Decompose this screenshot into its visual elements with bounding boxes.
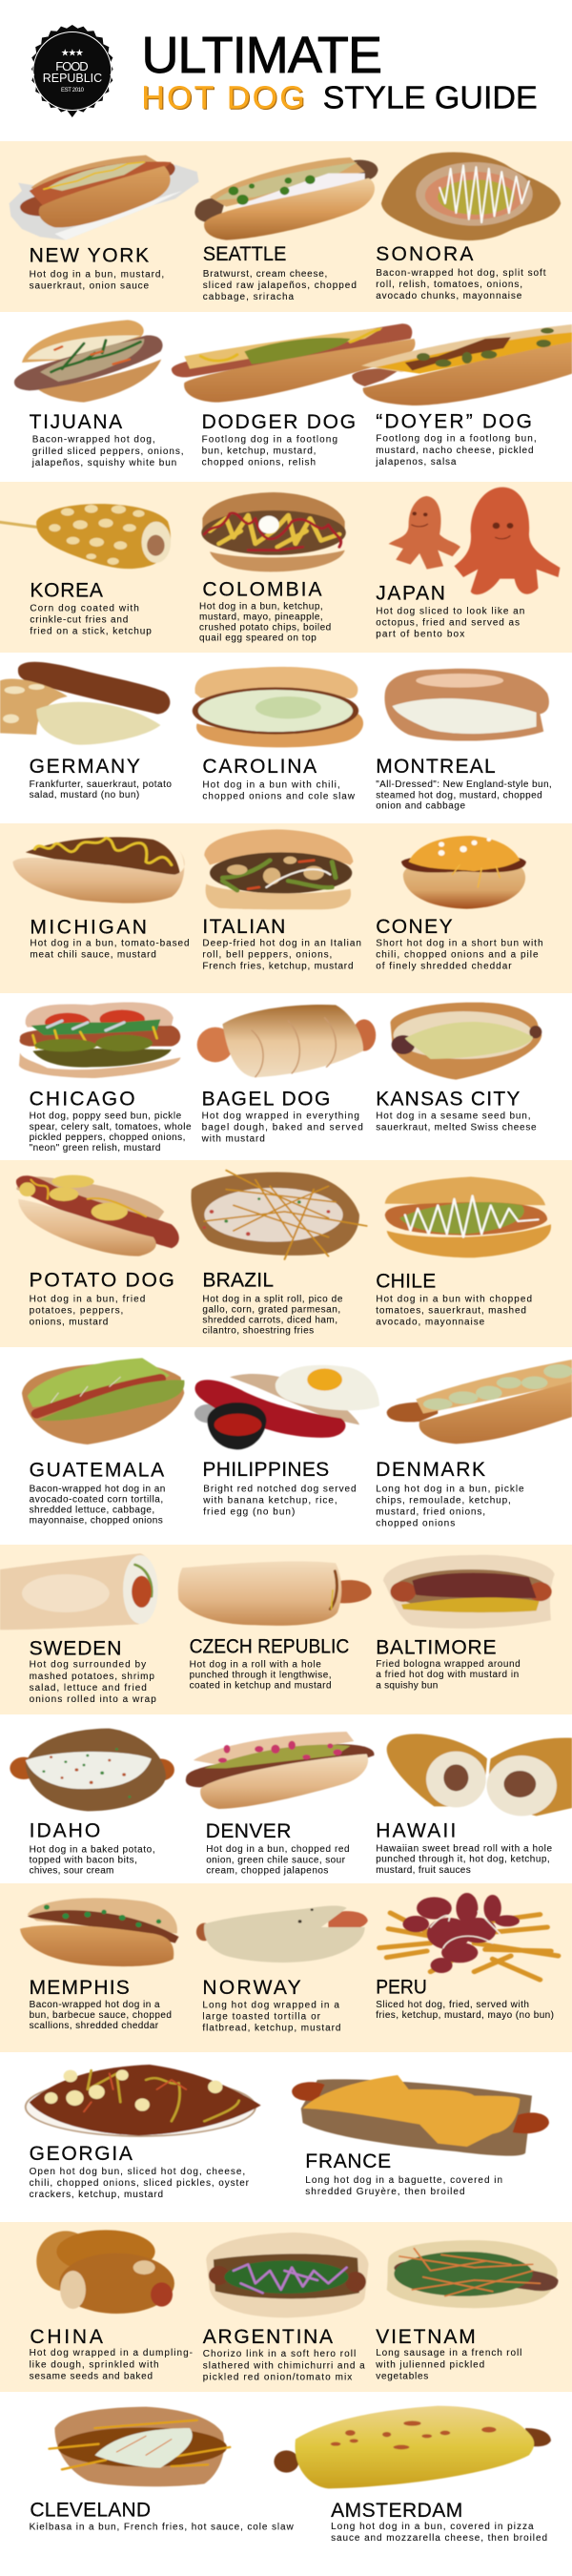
description: Philippines: Bright red notched dog served <box>203 1485 357 1495</box>
description: Chile <box>376 1294 532 1328</box>
title: Style Guide: STYLE GUIDE <box>323 80 538 115</box>
illustration: Montreal <box>384 669 549 741</box>
description: Guatemala <box>30 1484 165 1526</box>
description: Sonora: roll, relish, tomatoes, onions, <box>376 280 522 290</box>
description: Chile: tomatoes, sauerkraut, mashed <box>376 1306 526 1317</box>
description: Guatemala: avocado-coated corn tortilla, <box>30 1494 163 1505</box>
panel: row 7 <box>0 1160 572 1347</box>
description: Baltimore <box>376 1659 521 1691</box>
heading: Baltimore: BALTIMORE <box>376 1636 496 1658</box>
description: Czech Republic: coated in ketchup and mustard <box>190 1681 332 1692</box>
heading: Sweden: SWEDEN <box>30 1637 121 1659</box>
heading: Peru: PERU <box>376 1976 427 1998</box>
description: Idaho: topped with bacon bits, <box>30 1855 137 1865</box>
description: Colombia: quail egg speared on top <box>199 634 317 644</box>
description: Sonora: Bacon-wrapped hot dog, split soft <box>376 268 546 279</box>
entry: Italian <box>202 829 361 972</box>
description: Bagel Dog: Hot dog wrapped in everything <box>202 1111 359 1122</box>
description: Peru: Sliced hot dog, fried, served with <box>376 2000 529 2010</box>
illustration: Tijuana <box>14 320 163 403</box>
entry: Dodger Dog <box>172 323 416 468</box>
description: Argentina: Chorizo link in a soft hero roll <box>203 2349 356 2359</box>
description: Japan: octopus, fried and served as <box>376 618 520 629</box>
entry: Denmark <box>376 1360 572 1528</box>
entry: Norway <box>196 1905 368 2033</box>
illustration: Norway <box>196 1905 368 1963</box>
description: Japan: Hot dog sliced to look like an <box>376 607 524 617</box>
illustration: Coney <box>401 836 526 909</box>
description: Montreal: onion and cabbage <box>376 800 465 811</box>
description: Dodger Dog: Footlong dog in a footlong <box>202 435 337 446</box>
description: Germany: Frankfurter, sauerkraut, potato <box>30 779 172 790</box>
description: Korea: fried on a stick, ketchup <box>30 627 152 637</box>
description: Tijuana: jalapeños, squishy white bun <box>31 458 176 468</box>
illustration: Chile <box>385 1176 551 1257</box>
description: China <box>30 2348 193 2381</box>
description: Georgia <box>30 2167 250 2200</box>
description: Denver: cream, chopped jalapenos <box>206 1865 328 1876</box>
description: Hawaii: Hawaiian sweet bread roll with a hole <box>376 1844 552 1855</box>
description: Carolina: chopped onions and cole slaw <box>202 791 356 801</box>
description: Dodger Dog <box>202 435 337 468</box>
description: Norway <box>202 2000 340 2033</box>
panel: row 14 <box>30 2406 551 2544</box>
illustration: Sonora <box>381 152 561 240</box>
heading: China: CHINA <box>30 2326 103 2348</box>
description: Korea: Corn dog coated with <box>30 603 139 613</box>
description: Chicago: Hot dog, poppy seed bun, pickle <box>30 1111 182 1122</box>
description: Seattle <box>203 269 357 302</box>
description: Montreal <box>376 779 552 811</box>
entry: New York <box>10 156 199 292</box>
panel: row 11 <box>0 1883 572 2052</box>
description: Montreal: "All-Dressed": New England-style bun, <box>376 779 552 790</box>
entry: Vietnam <box>375 2240 559 2381</box>
illustration: Hawaii <box>387 1734 572 1816</box>
entry: Colombia <box>199 492 346 644</box>
description: Idaho: chives, sour cream <box>30 1866 113 1877</box>
description: Amsterdam: sauce and mozzarella cheese, then broiled <box>331 2533 547 2544</box>
entry: Kansas City <box>376 1003 541 1133</box>
description: New York <box>30 270 164 292</box>
description: France: Long hot dog in a baguette, covered in <box>305 2175 502 2186</box>
description: Coney: Short hot dog in a short bun with <box>376 939 543 949</box>
illustration: Chicago <box>19 1002 180 1078</box>
description: Hawaii <box>376 1844 552 1876</box>
panel: row 10 <box>10 1729 572 1877</box>
description: Kansas City <box>376 1111 537 1133</box>
heading: Coney: CONEY <box>376 916 453 938</box>
description: France <box>305 2175 502 2197</box>
panel: row 8 <box>22 1358 572 1528</box>
panel: row 13 <box>0 2222 572 2392</box>
description: Coney: of finely shredded cheddar <box>376 962 512 972</box>
description: Brazil: cilantro, shoestring fries <box>202 1326 314 1337</box>
entry: Argentina <box>203 2233 369 2382</box>
description: Bagel Dog <box>201 1111 363 1145</box>
illustration: Cleveland <box>50 2407 230 2486</box>
entry: Chile <box>376 1176 551 1328</box>
illustration: China <box>36 2230 174 2314</box>
heading: Michigan: MICHIGAN <box>30 917 147 939</box>
description: Memphis: bun, barbecue sauce, chopped <box>30 2010 172 2021</box>
entry: Czech Republic <box>178 1562 372 1692</box>
description: Dodger Dog: chopped onions, relish <box>202 458 316 468</box>
illustration: Germany <box>0 662 170 745</box>
panel: row 6 <box>19 1002 541 1153</box>
illustration: France <box>292 2075 549 2156</box>
entry: Idaho <box>10 1729 174 1877</box>
description: Coney: chili, chopped onions and a pile <box>376 950 539 961</box>
title: Ultimate: ULTIMATE <box>141 27 382 84</box>
illustration: Argentina <box>206 2233 369 2317</box>
description: Michigan <box>30 938 190 961</box>
description: Dodger Dog: bun, ketchup, mustard, <box>202 447 316 457</box>
entry: Tijuana <box>14 320 184 468</box>
description: Denmark: chips, remoulade, ketchup, <box>376 1495 511 1506</box>
description: Michigan: meat chili sauce, mustard <box>30 950 156 961</box>
description: Memphis: Bacon-wrapped hot dog in a <box>30 2000 160 2010</box>
description: Philippines: with banana ketchup, rice, <box>202 1496 337 1506</box>
panel: row 12 <box>26 2065 549 2200</box>
description: New York: Hot dog in a bun, mustard, <box>30 270 164 280</box>
description: Carolina <box>202 779 356 801</box>
heading: Denver: DENVER <box>206 1820 291 1842</box>
description: Tijuana: grilled sliced peppers, onions, <box>32 447 184 457</box>
illustration: Baltimore <box>383 1555 555 1629</box>
panel: row 4 <box>0 662 552 811</box>
heading: New York: NEW YORK <box>30 245 149 267</box>
heading: Chile: CHILE <box>376 1270 436 1292</box>
description: Italian: Deep-fried hot dog in an Italian <box>202 938 361 948</box>
description: Italian <box>202 938 361 972</box>
illustration: Carolina <box>193 667 363 747</box>
description: Czech Republic: Hot dog in a roll with a hole <box>190 1659 321 1670</box>
header <box>31 25 538 117</box>
logo: Food Republic badge <box>31 25 113 117</box>
description: Colombia <box>199 601 331 644</box>
entry: Amsterdam <box>274 2406 551 2544</box>
heading: Kansas City: KANSAS CITY <box>376 1089 520 1111</box>
heading: Dodger Dog: DODGER DOG <box>202 411 356 433</box>
illustration: Japan octopus hot dogs <box>389 488 560 594</box>
description: Argentina <box>203 2349 365 2382</box>
heading: Germany: GERMANY <box>30 756 140 778</box>
illustration: Memphis <box>20 1898 179 1966</box>
heading: Chicago: CHICAGO <box>30 1088 135 1110</box>
description: Denver: onion, green chile sauce, sour <box>206 1855 346 1865</box>
description: Sweden <box>30 1660 156 1705</box>
illustration: Seattle <box>194 157 378 240</box>
entry: Peru <box>376 1893 559 2021</box>
description: Chicago: pickled peppers, chopped onions, <box>30 1132 185 1143</box>
entry: Michigan <box>12 837 190 961</box>
description: Denmark: Long hot dog in a bun, pickle <box>376 1484 524 1494</box>
description: Baltimore: a fried hot dog with mustard in <box>376 1670 519 1680</box>
panel: row 2 <box>14 320 572 468</box>
heading: Montreal: MONTREAL <box>376 756 496 778</box>
heading: Japan: JAPAN <box>376 582 445 604</box>
entry: Germany <box>0 662 172 800</box>
heading: Hawaii: HAWAII <box>376 1819 456 1841</box>
illustration: New York <box>10 156 199 240</box>
description: Seattle: cabbage, sriracha <box>203 292 295 302</box>
description: Seattle: sliced raw jalapeños, chopped <box>203 280 357 291</box>
illustration: Guatemala <box>22 1358 184 1444</box>
entry: Coney <box>376 836 543 972</box>
illustration: Doyer Dog <box>352 324 572 405</box>
illustration: Vietnam <box>387 2240 559 2308</box>
description: Kansas City: Hot dog in a sesame seed bun, <box>376 1111 530 1122</box>
panel: row 9 <box>0 1545 572 1714</box>
description: Sonora: avocado chunks, mayonnaise <box>376 291 522 301</box>
description: Korea: crinkle-cut fries and <box>30 615 128 626</box>
illustration: Czech Republic <box>178 1562 372 1626</box>
title: Hot Dog (orange with drop shadow): HOT DOG <box>143 81 306 116</box>
description: Guatemala: shredded lettuce, cabbage, <box>30 1505 154 1515</box>
heading: Argentina: ARGENTINA <box>203 2326 333 2348</box>
illustration: Philippines <box>194 1365 379 1449</box>
panel: row 3 <box>0 482 572 653</box>
description: Brazil: shredded carrots, diced ham, <box>202 1316 337 1326</box>
description: Sweden: onions rolled into a wrap <box>30 1694 156 1705</box>
heading: Norway: NORWAY <box>202 1977 301 1999</box>
description: New York: sauerkraut, onion sauce <box>30 281 150 292</box>
description: Colombia: mustard, mayo, pineapple, <box>199 612 323 622</box>
description: China: like dough, sprinkled with <box>30 2359 158 2370</box>
description: Denmark: mustard, fried onions, <box>376 1506 485 1517</box>
entry: Philippines <box>194 1365 379 1518</box>
entry: Japan <box>376 488 560 640</box>
heading: Carolina: CAROLINA <box>202 756 317 778</box>
description: Norway: Long hot dog wrapped in a <box>202 2000 339 2010</box>
illustration: Michigan <box>12 837 185 904</box>
description: Chile: Hot dog in a bun with chopped <box>376 1294 532 1304</box>
entry: China <box>30 2230 193 2381</box>
heading: Colombia: COLOMBIA <box>202 579 322 601</box>
description: Doyer Dog <box>375 434 537 467</box>
entry: Sweden <box>0 1553 158 1705</box>
entry: Carolina <box>193 667 363 801</box>
heading: Italian: ITALIAN <box>202 916 285 938</box>
heading: Bagel Dog: BAGEL DOG <box>202 1089 330 1111</box>
description: Korea <box>30 603 152 637</box>
description: Amsterdam: Long hot dog in a bun, covered in pizza <box>331 2522 534 2532</box>
entry: Doyer Dog <box>352 324 572 467</box>
description: Potato Dog: potatoes, peppers, <box>30 1306 123 1317</box>
description: Georgia: crackers, ketchup, mustard <box>30 2190 163 2200</box>
description: Italian: French fries, ketchup, mustard <box>202 962 353 972</box>
entry: Montreal <box>376 669 552 811</box>
description: Guatemala: mayonnaise, chopped onions <box>30 1515 163 1526</box>
entry: France <box>292 2075 549 2197</box>
description: Philippines: fried egg (no bun) <box>203 1507 295 1518</box>
heading: Georgia: GEORGIA <box>30 2143 133 2165</box>
description: Chile: avocado, mayonnaise <box>376 1318 485 1328</box>
description: Montreal: steamed hot dog, mustard, chopped <box>376 790 542 800</box>
illustration: Georgia <box>26 2065 261 2136</box>
entry: Chicago <box>19 1002 192 1153</box>
heading: Potato Dog: POTATO DOG <box>30 1270 174 1292</box>
illustration: Idaho <box>10 1729 174 1811</box>
description: Italian: roll, bell peppers, onions, <box>202 950 332 961</box>
description: Vietnam: vegetables <box>376 2371 428 2381</box>
description: France: shredded Gruyère, then broiled <box>305 2187 465 2197</box>
logo: Food Republic badge: REPUBLIC <box>43 71 102 85</box>
description: Denmark <box>376 1484 524 1528</box>
description: Seattle: Bratwurst, cream cheese, <box>203 269 327 280</box>
illustration: Korea <box>0 504 171 569</box>
description: Bagel Dog: bagel dough, baked and served <box>202 1123 363 1133</box>
heading: Philippines: PHILIPPINES <box>202 1459 329 1481</box>
description: Idaho <box>30 1844 155 1877</box>
description: Colombia: crushed potato chips, boiled <box>199 622 331 633</box>
logo: Food Republic badge: EST 2010 <box>61 88 85 93</box>
description: Baltimore: Fried bologna wrapped around <box>376 1659 521 1670</box>
entry: Baltimore <box>376 1555 555 1691</box>
description: Memphis: scallions, shredded cheddar <box>30 2021 159 2031</box>
description: Philippines <box>202 1485 357 1518</box>
heading: Cleveland: CLEVELAND <box>30 2499 151 2521</box>
description: Idaho: Hot dog in a baked potato, <box>30 1844 155 1855</box>
heading: France: FRANCE <box>305 2150 391 2172</box>
description: Sweden: mashed potatoes, shrimp <box>30 1672 154 1682</box>
heading: Denmark: DENMARK <box>376 1459 485 1481</box>
description: Czech Republic: punched through it lengthwise, <box>190 1670 332 1680</box>
description: Doyer Dog: Footlong dog in a footlong bun, <box>376 434 537 445</box>
description: Potato Dog <box>30 1294 145 1328</box>
heading: Idaho: IDAHO <box>30 1819 100 1841</box>
description: Vietnam: with julienned pickled <box>375 2359 484 2370</box>
illustration: Brazil <box>191 1171 367 1259</box>
description: Brazil: Hot dog in a split roll, pico de <box>202 1294 343 1304</box>
description: Amsterdam <box>331 2522 547 2544</box>
description: Argentina: pickled red onion/tomato mix <box>203 2372 352 2382</box>
description: Sweden: Hot dog surrounded by <box>30 1660 146 1671</box>
entry: Sonora <box>376 152 561 301</box>
heading: Korea: KOREA <box>30 579 103 601</box>
logo: Food Republic badge: FOOD <box>55 59 89 73</box>
description: Carolina: Hot dog in a bun with chili, <box>202 779 340 790</box>
entry: Seattle <box>194 157 378 302</box>
description: Chicago: spear, celery salt, tomatoes, whole <box>30 1122 192 1132</box>
description: Chicago: "neon" green relish, mustard <box>30 1143 160 1153</box>
description: Peru: fries, ketchup, mustard, mayo (no bun) <box>376 2010 554 2021</box>
description: Doyer Dog: mustard, nacho cheese, pickled <box>376 446 534 456</box>
heading: Amsterdam: AMSTERDAM <box>331 2500 462 2522</box>
entry: Brazil <box>191 1171 367 1337</box>
description: Hawaii: mustard, fruit sauces <box>376 1865 471 1876</box>
description: Potato Dog: Hot dog in a bun, fried <box>30 1294 145 1304</box>
description: Brazil <box>202 1294 343 1337</box>
description: China: Hot dog wrapped in a dumpling- <box>30 2348 193 2358</box>
description: Chicago <box>30 1111 192 1153</box>
illustration: Dodger Dog <box>172 323 416 403</box>
illustration: Peru <box>379 1893 559 1980</box>
entry: Korea <box>0 504 171 637</box>
entry: Guatemala <box>22 1358 184 1526</box>
description: Denver <box>206 1844 350 1876</box>
illustration: Kansas City <box>390 1003 541 1080</box>
entry: Memphis <box>20 1898 179 2031</box>
description: Denver: Hot dog in a bun, chopped red <box>206 1844 350 1855</box>
entry: Denver <box>186 1732 374 1876</box>
description: Bagel Dog: with mustard <box>201 1134 265 1145</box>
description: Norway: flatbread, ketchup, mustard <box>202 2023 340 2033</box>
description: Vietnam: Long sausage in a french roll <box>376 2348 521 2358</box>
illustration: Denmark <box>387 1360 572 1444</box>
title: Hot Dog (orange with drop shadow): HOT DOG <box>141 80 305 115</box>
description: Norway: large toasted tortilla or <box>202 2011 321 2022</box>
description: Peru <box>376 2000 554 2021</box>
description: Germany: salad, mustard (no bun) <box>30 790 139 800</box>
description: Tijuana <box>31 435 184 468</box>
illustration: Denver <box>186 1732 374 1809</box>
entry: Potato Dog <box>16 1175 179 1328</box>
description: Tijuana: Bacon-wrapped hot dog, <box>32 435 155 446</box>
description: Doyer Dog: jalapenos, salsa <box>375 457 457 467</box>
description: China: sesame seeds and baked <box>30 2371 153 2381</box>
illustration: Colombia <box>201 492 346 571</box>
heading: Memphis: MEMPHIS <box>30 1977 130 1999</box>
entry: Hawaii <box>376 1734 572 1876</box>
illustration: Sweden <box>0 1553 158 1630</box>
description: Sweden: salad, lettuce and fried <box>30 1683 147 1693</box>
illustration: Bagel Dog <box>197 1005 376 1077</box>
description: Kansas City: sauerkraut, melted Swiss cheese <box>376 1123 537 1133</box>
illustration: Potato Dog <box>16 1175 179 1257</box>
logo: Food Republic badge: ★★★ <box>61 48 84 59</box>
description: Georgia: chili, chopped onions, sliced pickles, oyster <box>30 2178 250 2189</box>
description: Guatemala: Bacon-wrapped hot dog in an <box>30 1484 165 1494</box>
panel: row 1 <box>0 141 572 312</box>
description: Germany <box>30 779 172 800</box>
heading: Vietnam: VIETNAM <box>376 2326 476 2348</box>
description: Coney <box>376 939 543 972</box>
description: Vietnam <box>375 2348 521 2381</box>
description: Potato Dog: onions, mustard <box>30 1318 108 1328</box>
illustration: Amsterdam <box>274 2406 551 2488</box>
panel: row 5 <box>0 823 572 993</box>
illustration: Italian <box>204 829 353 909</box>
description: Georgia: Open hot dog bun, sliced hot dog, cheese, <box>30 2167 245 2177</box>
heading: Guatemala: GUATEMALA <box>30 1459 164 1481</box>
description: Brazil: gallo, corn, grated parmesan, <box>202 1304 340 1315</box>
entry: Bagel Dog <box>197 1005 376 1145</box>
description: Baltimore: a squishy bun <box>376 1680 438 1691</box>
description: Czech Republic <box>190 1659 332 1692</box>
heading: Brazil: BRAZIL <box>202 1270 274 1292</box>
heading: Seattle: SEATTLE <box>203 243 286 265</box>
description: Sonora <box>376 268 546 301</box>
description: Argentina: slathered with chimichurri and a <box>203 2360 365 2371</box>
heading: Doyer Dog: “DOYER” DOG <box>376 411 532 433</box>
heading: Sonora: SONORA <box>376 243 473 265</box>
entry: Georgia <box>26 2065 261 2200</box>
description: Japan: part of bento box <box>376 630 464 640</box>
description: Memphis <box>30 2000 172 2031</box>
heading: Tijuana: TIJUANA <box>30 411 122 433</box>
description: Japan <box>376 607 524 640</box>
description: Denmark: chopped onions <box>376 1518 455 1528</box>
heading: Czech Republic: CZECH REPUBLIC <box>190 1635 349 1657</box>
description: Michigan: Hot dog in a bun, tomato-based <box>30 938 190 948</box>
entry: Cleveland <box>30 2407 294 2533</box>
description: Hawaii: punched through it, hot dog, ketchup, <box>376 1855 550 1865</box>
description: Colombia: Hot dog in a bun, ketchup, <box>199 601 323 612</box>
description: Cleveland: Kielbasa in a bun, French fries, hot sauce, cole slaw <box>30 2523 294 2533</box>
